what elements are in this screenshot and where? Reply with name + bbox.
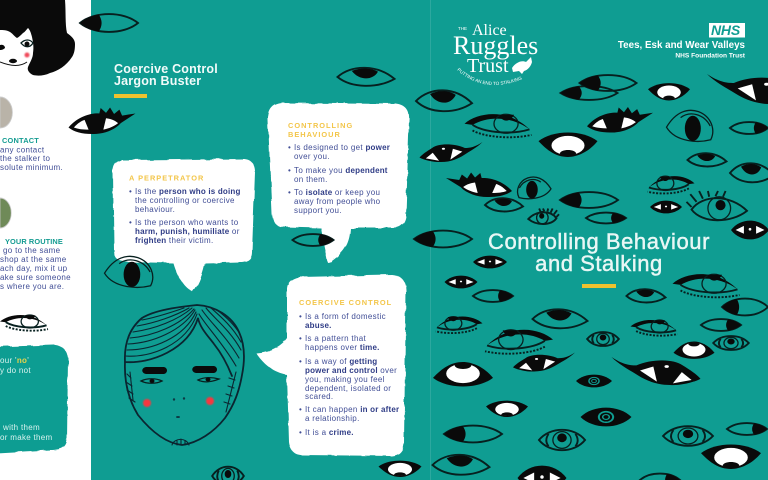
eye: small black 3 bbox=[444, 276, 478, 288]
eye: small lashed bbox=[528, 208, 559, 224]
eye: top centre bbox=[338, 68, 394, 86]
text: controlling behaviour: BEHAVIOUR bbox=[288, 130, 341, 139]
eye: detailed right bbox=[672, 274, 740, 297]
eye: lid left bbox=[416, 90, 472, 111]
section text: contact: CONTACT bbox=[2, 136, 39, 145]
eye: lashed bbox=[587, 107, 653, 133]
eye: side-looking 2 bbox=[560, 192, 618, 208]
eye: oval pupil 2 bbox=[518, 177, 551, 199]
eye: below coercive bubble bbox=[378, 461, 422, 477]
text: coercive control: happens over time. bbox=[305, 343, 380, 352]
eye: winged top right bbox=[707, 74, 768, 104]
eye: dome inverted small bbox=[674, 342, 714, 359]
text: coercive control: scared. bbox=[305, 392, 333, 401]
eye: small black 2 bbox=[473, 256, 507, 268]
text: coercive control: Is a form of domestic bbox=[305, 312, 386, 321]
eye: detailed mid bbox=[630, 320, 678, 336]
eye: lid small bbox=[688, 153, 726, 166]
eye: left panel top bbox=[80, 14, 138, 32]
illustration: woman with black hair bbox=[0, 0, 75, 76]
eye: lid right bbox=[730, 163, 768, 182]
eye: side-looking 6 bbox=[722, 299, 768, 315]
eye: side-looking 4 bbox=[414, 231, 472, 247]
eye: lid centre right bbox=[626, 289, 666, 302]
text: coercive control: • bbox=[299, 312, 302, 321]
eye: right edge bbox=[731, 221, 768, 239]
section text: routine: YOUR ROUTINE bbox=[5, 237, 63, 246]
section text: routine: ach day, mix it up bbox=[0, 264, 68, 273]
text: a perpetrator: the controlling or coercive bbox=[135, 196, 235, 205]
eye: oval pupil bbox=[666, 110, 713, 141]
heading: jargon buster: Jargon Buster bbox=[114, 74, 201, 88]
logo: NHS Trust: NHS Foundation Trust bbox=[675, 52, 746, 60]
eye: lashed 2 bbox=[446, 172, 512, 197]
section text: contact bbox=[0, 136, 63, 172]
text: coercive control: It can happen in or after bbox=[305, 405, 399, 414]
text: controlling behaviour: support you. bbox=[294, 206, 342, 215]
text: coercive control: • bbox=[299, 357, 302, 366]
text: coercive control: you, making you feel bbox=[305, 375, 385, 384]
text: controlling behaviour: • bbox=[288, 166, 291, 175]
title: Controlling Behaviour and Stalking: and Stalking bbox=[535, 251, 663, 276]
eye: detailed left bbox=[436, 317, 482, 333]
eye: side-looking bbox=[730, 122, 768, 134]
logo: The Alice Ruggles Trust: Alice bbox=[472, 22, 507, 39]
title: Controlling Behaviour and Stalking: Controlling Behaviour bbox=[488, 229, 710, 254]
eye: black dome bottom bbox=[701, 445, 761, 469]
text: a perpetrator: Is the person who is doing bbox=[135, 187, 241, 196]
logo: NHS Trust: NHS bbox=[711, 22, 741, 38]
accent bar bbox=[114, 94, 147, 98]
text: a perpetrator: • bbox=[129, 187, 132, 196]
eye: ringed 4 bbox=[663, 426, 713, 446]
text: coercive control bbox=[299, 298, 399, 437]
teal callout on left panel: with them bbox=[2, 423, 40, 432]
teal callout on left panel: y do not bbox=[0, 366, 31, 375]
eye: bottom right bbox=[640, 474, 680, 480]
text: controlling behaviour: away from people who bbox=[294, 197, 381, 206]
text: a perpetrator: • bbox=[129, 218, 132, 227]
eye: black dome large bbox=[538, 133, 598, 157]
text: controlling behaviour bbox=[288, 121, 390, 215]
text: coercive control: • bbox=[299, 428, 302, 437]
text: coercive control: COERCIVE CONTROL bbox=[299, 298, 392, 307]
eye: bottom under face bbox=[212, 467, 244, 480]
illustration: man's face bbox=[125, 305, 244, 445]
eye: side-looking 8 bbox=[444, 426, 502, 442]
eye: double outline front bbox=[560, 86, 618, 100]
teal callout on left panel bbox=[0, 345, 68, 453]
eye: spiral 2 bbox=[580, 408, 632, 426]
eye: side-looking 7 bbox=[701, 319, 741, 331]
logo: The Alice Ruggles Trust: Ruggles bbox=[453, 31, 538, 60]
text: a perpetrator: frighten their victim. bbox=[135, 236, 214, 245]
speech bubble shape: a perpetrator bbox=[113, 159, 255, 292]
text: controlling behaviour: To make you dependent bbox=[294, 166, 388, 175]
eye: dome inverted large bbox=[433, 362, 493, 386]
text: coercive control: power and control over bbox=[305, 366, 397, 375]
title accent bar bbox=[582, 284, 616, 288]
section text: contact: solute minimum. bbox=[0, 163, 63, 172]
text: a perpetrator bbox=[129, 174, 241, 245]
title: Controlling Behaviour and Stalking bbox=[488, 229, 710, 276]
section text: contact: the stalker to bbox=[0, 154, 51, 163]
teal callout on left panel: or make them bbox=[0, 433, 53, 442]
eye: black dome small bbox=[486, 401, 528, 417]
text: controlling behaviour: To isolate or keep you bbox=[294, 188, 380, 197]
logo: The Alice Ruggles Trust bbox=[453, 22, 538, 85]
eye: on controlling bubble tail bbox=[292, 234, 334, 246]
text: a perpetrator: harm, punish, humiliate or bbox=[135, 227, 240, 236]
logo: The Alice Ruggles Trust: PUTTING AN END TO STALKING bbox=[457, 68, 522, 85]
eye: detailed small bbox=[648, 176, 694, 193]
eye: winged large bbox=[612, 357, 700, 385]
section text: routine: shop at the same bbox=[0, 255, 67, 264]
text: a perpetrator: A PERPETRATOR bbox=[129, 174, 204, 182]
eye: winged left bbox=[420, 142, 482, 162]
text: controlling behaviour: • bbox=[288, 143, 291, 152]
eye: detailed bbox=[464, 114, 532, 137]
section text: routine: go to the same bbox=[3, 246, 61, 255]
eye: small black bbox=[650, 201, 682, 213]
section text: routine bbox=[0, 237, 71, 291]
heading: jargon buster bbox=[114, 62, 218, 88]
section text: routine: ake sure someone bbox=[0, 273, 71, 282]
photo circle: contact bbox=[0, 97, 12, 128]
eye: lid centre bbox=[532, 309, 588, 328]
text: controlling behaviour: over you. bbox=[294, 152, 330, 161]
eye: side-looking 5 bbox=[473, 290, 513, 302]
text: a perpetrator: Is the person who wants to bbox=[135, 218, 239, 227]
eye: side-looking 9 bbox=[727, 423, 767, 435]
eye: black with white dome bbox=[648, 83, 690, 100]
eye: winged right bbox=[513, 352, 575, 372]
text: controlling behaviour: Is designed to get power bbox=[294, 143, 390, 152]
text: coercive control: • bbox=[299, 405, 302, 414]
logo: The Alice Ruggles Trust: Trust bbox=[467, 55, 509, 77]
eye: left panel bottom bbox=[0, 315, 48, 331]
eye: over perpetrator bubble bbox=[104, 256, 153, 287]
section text: contact: any contact bbox=[0, 146, 45, 154]
eye: large detailed lashed bbox=[686, 191, 747, 220]
eye: lid bottom left bbox=[432, 455, 490, 475]
speech bubble shape: controlling behaviour bbox=[268, 103, 409, 263]
eye: lashed on panel edge bbox=[68, 108, 136, 134]
text: coercive control: dependent, isolated or bbox=[305, 384, 391, 393]
text: coercive control: abuse. bbox=[305, 321, 332, 330]
eye: ringed 2 bbox=[713, 336, 749, 350]
section text: routine: s where you are. bbox=[0, 282, 64, 291]
text: coercive control: Is a way of getting bbox=[305, 357, 377, 366]
logo: The Alice Ruggles Trust: THE bbox=[458, 26, 467, 31]
eye: ringed bbox=[587, 332, 619, 346]
speech bubble shape: coercive control bbox=[256, 275, 406, 456]
text: coercive control: Is a pattern that bbox=[305, 334, 366, 343]
text: controlling behaviour: CONTROLLING bbox=[288, 121, 353, 130]
text: coercive control: • bbox=[299, 334, 302, 343]
eye: lid small 2 bbox=[485, 198, 523, 211]
text: controlling behaviour: • bbox=[288, 188, 291, 197]
eye: side-looking 3 bbox=[586, 213, 626, 223]
text: coercive control: It is a crime. bbox=[305, 428, 354, 437]
photo circle: routine bbox=[0, 198, 11, 228]
eye: spiral bbox=[576, 375, 612, 387]
eye: large detailed bbox=[485, 330, 553, 354]
heading: jargon buster: Coercive Control bbox=[114, 62, 218, 76]
logo: NHS Trust: Tees, Esk and Wear Valleys bbox=[618, 40, 746, 51]
text: a perpetrator: behaviour. bbox=[135, 205, 175, 214]
eye: ringed 3 bbox=[539, 430, 585, 450]
text: controlling behaviour: on them. bbox=[294, 175, 328, 184]
eye: double outline back bbox=[580, 75, 636, 91]
logo: NHS Trust bbox=[618, 22, 746, 60]
text: coercive control: a relationship. bbox=[305, 414, 360, 423]
white left panel bbox=[0, 0, 91, 480]
eye: bottom centre bbox=[518, 466, 566, 480]
teal callout on left panel: our 'no' bbox=[0, 356, 29, 365]
